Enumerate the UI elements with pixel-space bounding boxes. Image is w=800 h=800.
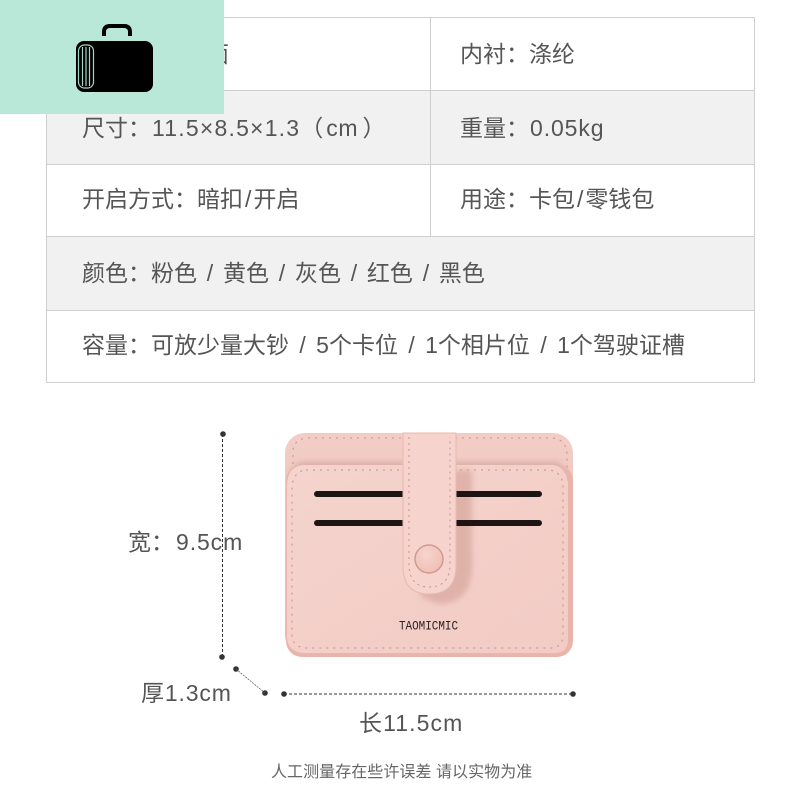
width dimension line [219, 431, 226, 660]
colours text: 颜色：粉色 / 黄色 / 灰色 / 红色 / 黑色 [82, 254, 485, 288]
brand name: TAOMICMIC [399, 618, 458, 634]
length label: 长11.5cm [359, 710, 463, 736]
teal overlay badge [0, 0, 224, 114]
column divider [430, 17, 431, 237]
flap shadow [420, 470, 472, 604]
capacity text: 容量：可放少量大钞 / 5个卡位 / 1个相片位 / 1个驾驶证槽 [82, 326, 685, 360]
length dimension line [281, 691, 576, 697]
thickness dimension line [233, 666, 268, 696]
material text: 面料：PU皮面 [82, 35, 229, 69]
front panel [286, 465, 573, 657]
width label: 宽：9.5cm [128, 523, 243, 557]
card slots [314, 491, 542, 497]
row 5: capacity [46, 310, 755, 383]
strap flap [403, 433, 456, 594]
lining text: 内衬：涤纶 [460, 35, 575, 69]
disclaimer note: 人工测量存在些许误差 请以实物为准 [271, 764, 532, 781]
icon: suitcase [76, 24, 153, 92]
row 1: material and lining [46, 17, 755, 91]
usage text: 用途：卡包/零钱包 [460, 180, 654, 214]
spec table [46, 17, 755, 383]
back panel [285, 433, 573, 655]
wallet [285, 433, 573, 657]
row 4: colours [46, 236, 755, 311]
thickness label: 厚1.3cm [141, 680, 232, 706]
front panel shadow [290, 462, 566, 480]
row 3: closure and usage [46, 164, 755, 237]
closure text: 开启方式：暗扣/开启 [82, 180, 299, 214]
row 2: size and weight [46, 90, 755, 165]
snap button [415, 545, 443, 573]
weight text: 重量：0.05kg [460, 109, 604, 143]
size text: 尺寸：11.5×8.5×1.3（cm ） [82, 109, 386, 143]
